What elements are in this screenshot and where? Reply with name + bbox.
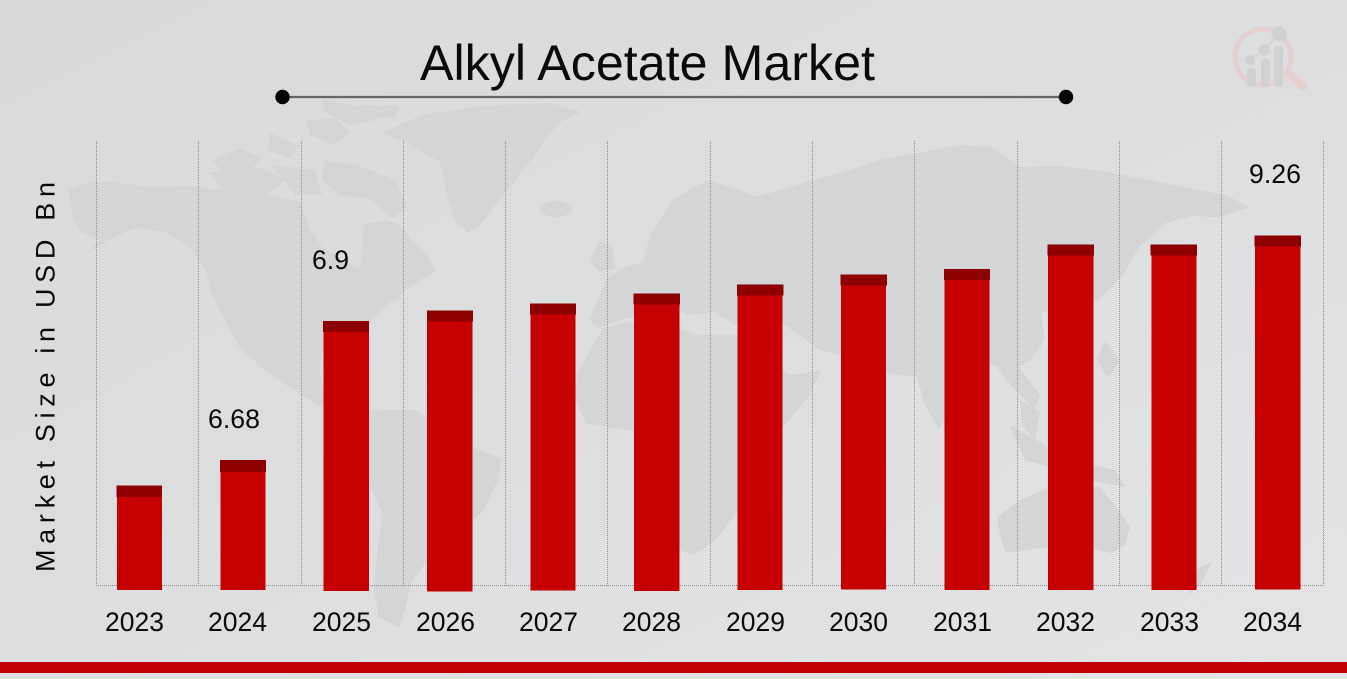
map: South America [354,410,501,627]
title: Alkyl Acetate Market [420,35,875,91]
bar 2025 [323,321,369,591]
map: Britain [590,240,615,272]
bar 2030 [840,274,887,590]
bar 2029 [737,284,784,590]
map: Iceland [540,201,572,217]
title rule with end dots [275,90,1073,104]
value labels: 9.26 [1249,159,1301,189]
y-axis title: Market Size in USD Bn [30,182,60,572]
bar chart [116,236,1301,592]
map: New Zealand [1188,562,1212,595]
map: North America [68,181,436,415]
x-axis year labels: 2033 [1140,607,1199,637]
bar 2032 [1048,244,1094,590]
bar 2027 [530,304,576,590]
map: Africa [574,322,821,555]
x-axis year labels: 2024 [208,607,267,637]
bar 2028 [634,294,680,591]
x-axis year labels: 2028 [622,607,681,637]
bar 2031 [944,269,990,590]
x-axis year labels [105,607,1302,637]
chart gridlines [96,141,1324,586]
x-axis year labels: 2031 [933,607,992,637]
bar 2024 [220,460,266,590]
bar 2026 [427,310,473,592]
bar 2033 [1150,244,1197,590]
x-axis year labels: 2029 [726,607,785,637]
bottom red band [0,662,1347,673]
bar 2034 [1254,236,1301,590]
map: Australia [997,487,1130,553]
value labels [208,159,1301,434]
map: Madagascar [723,449,743,491]
x-axis year labels: 2030 [829,607,888,637]
x-axis year labels: 2027 [519,607,578,637]
logo: magnifier with bars [1235,26,1303,87]
x-axis year labels: 2032 [1036,607,1095,637]
world map watermark [68,100,1250,627]
x-axis year labels: 2026 [416,607,475,637]
map: Eurasia [590,145,1250,430]
bar 2023 [116,486,162,590]
value labels: 6.68 [208,404,260,434]
value labels: 6.9 [312,245,349,275]
map: Southeast Asia islands [1010,340,1125,487]
x-axis year labels: 2025 [312,607,371,637]
map: Arctic islands [208,100,408,218]
x-axis year labels: 2023 [105,607,164,637]
map: Greenland [382,103,582,233]
x-axis year labels: 2034 [1243,607,1302,637]
